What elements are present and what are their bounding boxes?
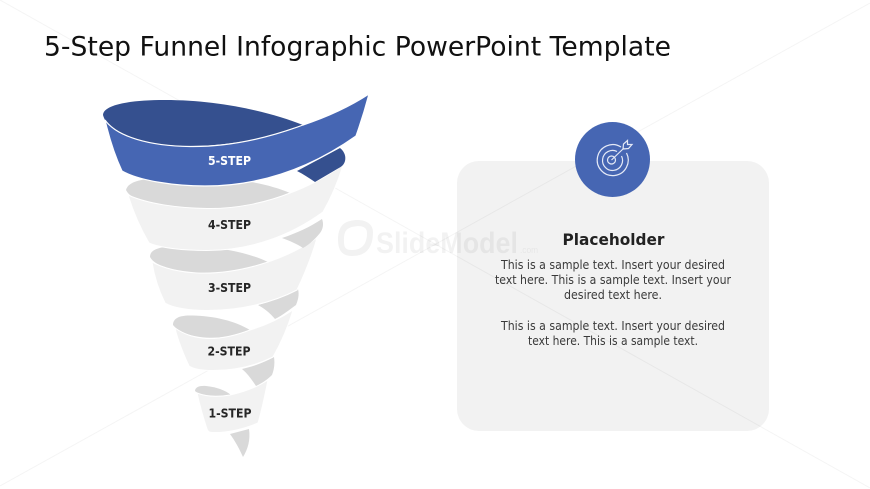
label: 2-step: 2-STEP [208, 344, 251, 358]
watermark: .com [520, 245, 538, 255]
icon: target with arrow [575, 122, 650, 197]
step 5 band group [103, 94, 369, 186]
step 3 band group [150, 238, 317, 319]
watermark [338, 220, 538, 260]
title: 5-Step Funnel Infographic PowerPoint Template [44, 32, 671, 62]
panel body text: text here. This is a sample text. Insert your [495, 273, 731, 287]
panel body text: text here. This is a sample text. [528, 334, 698, 348]
label: 1-step: 1-STEP [208, 406, 252, 420]
panel text [495, 230, 731, 348]
panel heading: Placeholder [562, 230, 665, 249]
panel: placeholder background [457, 161, 769, 431]
label: 3-step: 3-STEP [208, 281, 251, 295]
watermark: SlideModel [376, 227, 518, 260]
panel body text: desired text here. [564, 288, 662, 302]
step 2 band group [173, 310, 293, 386]
panel body text: This is a sample text. Insert your desired [500, 258, 725, 272]
label: 4-step: 4-STEP [208, 218, 251, 232]
funnel [103, 94, 369, 457]
panel body text [495, 258, 731, 348]
panel body text: This is a sample text. Insert your desired [500, 319, 725, 333]
step 4 band group [126, 165, 343, 250]
step 1 band group [195, 380, 268, 457]
label: 5-step: 5-STEP [208, 154, 251, 168]
